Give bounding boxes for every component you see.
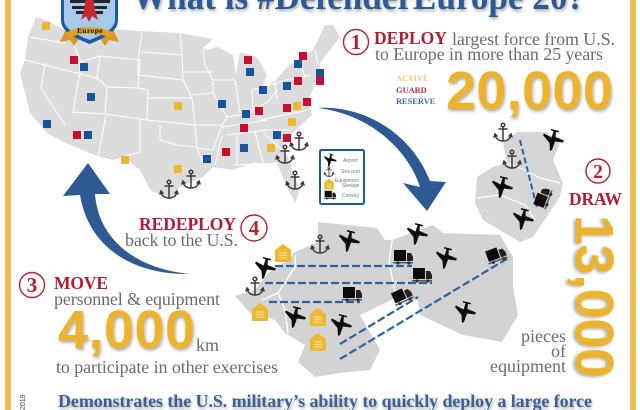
storage sites [252, 244, 326, 351]
map legend box [320, 150, 364, 204]
step 1: deploy: 1 [351, 30, 361, 54]
step 4: redeploy [125, 214, 267, 250]
logo label: Europe [77, 26, 103, 35]
state markers: reserve [43, 60, 324, 163]
map legend box: Convoy [342, 193, 359, 199]
step 3: move: 3 [27, 273, 37, 297]
right gold border [630, 0, 636, 410]
Baltic region map [475, 123, 564, 242]
map legend box: Equipment [335, 178, 360, 184]
km label: km [196, 335, 219, 355]
step 1: deploy [344, 28, 615, 64]
step 2: draw: DRAW [569, 189, 622, 209]
airports [255, 223, 476, 336]
big number 13,000: 13,000 [564, 215, 624, 378]
map legend box: Storage [342, 183, 360, 189]
ports [246, 235, 329, 295]
step 3: move [20, 272, 220, 309]
map legend box: Sea port [341, 169, 361, 175]
US sea ports [160, 132, 308, 198]
force legend [396, 74, 436, 106]
force legend: RESERVE [396, 97, 436, 106]
pieces of equipment: pieces [521, 326, 566, 346]
big number 20,000: 20,000 [446, 61, 613, 121]
step 4: redeploy: 4 [249, 216, 260, 240]
step 3: move: MOVE [54, 273, 108, 293]
left gold border [5, 0, 11, 410]
step 2: draw: 2 [593, 161, 603, 183]
convoy routes [265, 257, 510, 359]
map legend box: Airport [343, 158, 358, 164]
pieces of equipment: equipment [490, 356, 566, 376]
step 2: draw [569, 159, 622, 209]
big number 4,000: 4,000 [58, 300, 195, 360]
step 1: deploy: DEPLOY [374, 28, 447, 48]
force legend: GUARD [396, 86, 427, 95]
trucks [342, 245, 508, 307]
logo badge [60, 0, 119, 46]
step 1: deploy: largest force from U.S. [452, 29, 615, 49]
step 3: move: personnel & equipment [54, 289, 220, 309]
step 4: redeploy: REDEPLOY [139, 214, 236, 234]
force legend: ACTIVE [396, 74, 429, 83]
central Europe map [235, 222, 518, 377]
pieces of equipment: of [551, 341, 566, 361]
state markers: guard [70, 52, 324, 156]
exercises text: to participate in other exercises [56, 357, 278, 377]
step 1: deploy: to Europe in more than 25 years [375, 44, 603, 64]
arrow: redeploy to US [63, 163, 190, 274]
pieces of equipment [490, 326, 566, 376]
arrow: deploy to Europe [318, 108, 446, 211]
copyright year: 2019 [20, 394, 27, 410]
step 4: redeploy: back to the U.S. [125, 230, 238, 250]
US map [20, 17, 340, 203]
state markers: active [42, 22, 301, 173]
